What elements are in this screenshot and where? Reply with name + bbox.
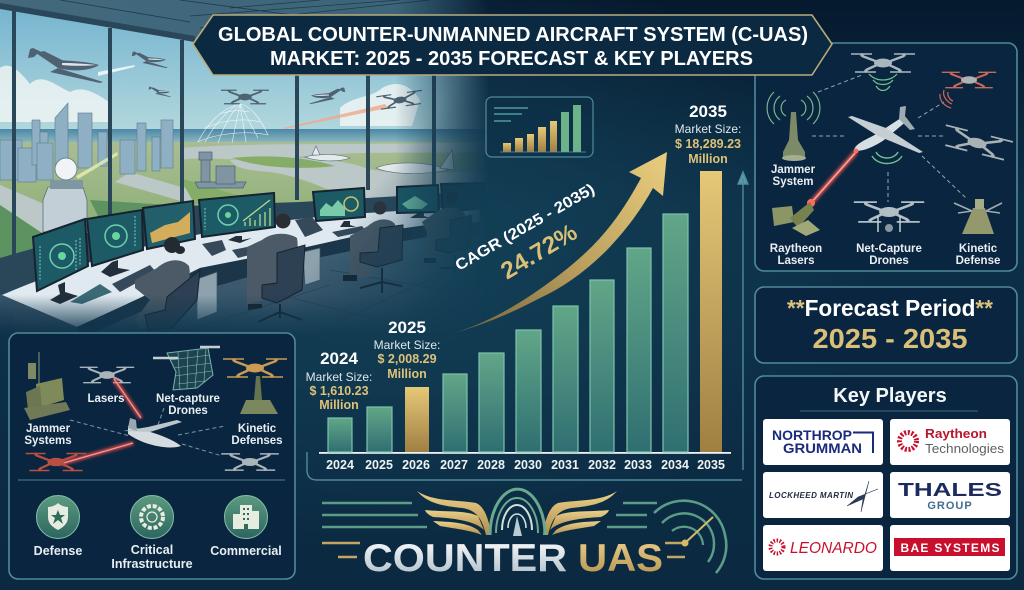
icon: central UAV — [848, 106, 923, 153]
wall below windows — [0, 194, 442, 295]
logo: northrop grumman — [763, 419, 883, 465]
logo: northrop grumman: GRUMMAN — [783, 440, 862, 456]
sky drones — [28, 48, 424, 110]
forecast heading: **Forecast Period** — [787, 295, 993, 321]
icon: net-capture drone — [854, 201, 924, 232]
ceiling — [0, 0, 500, 42]
bars — [328, 171, 722, 452]
year axis labels: 2027 — [440, 458, 468, 472]
sector: defense — [34, 496, 82, 558]
laser beams in the sky — [98, 65, 135, 76]
panel: left counter-drone and sectors — [9, 333, 295, 579]
callout: 2035 market size: Market Size: — [675, 122, 741, 136]
wordmark: COUNTER — [363, 537, 567, 580]
laser beam — [807, 148, 858, 207]
mini chart card — [486, 97, 593, 157]
runways — [0, 143, 470, 233]
parked airliners — [305, 146, 454, 174]
city skyline — [0, 103, 173, 182]
callout: 2035 market size: 2035 — [689, 102, 727, 121]
panel: top right counter-drone diagram — [755, 43, 1017, 271]
wings — [417, 491, 617, 535]
year axis labels: 2034 — [661, 458, 689, 472]
callout: 2025 market size: Market Size: — [374, 338, 440, 352]
label: raytheon lasers: Raytheon — [770, 243, 822, 255]
year axis labels: 2024 — [326, 458, 354, 472]
title line 2: MARKET: 2025 - 2035 FORECAST & KEY PLAYERS — [270, 48, 753, 70]
callout: CAGR: CAGR (2025 - 2035) — [452, 181, 598, 274]
icon: red drone — [26, 453, 86, 471]
year axis labels: 2026 — [402, 458, 430, 472]
label: critical infrastructure: Critical — [131, 543, 173, 557]
icon: net-capture drone — [153, 347, 220, 390]
logo: Counter UAS — [322, 489, 726, 580]
banner title — [193, 15, 832, 75]
callout: 2024 market size: Market Size: — [306, 370, 372, 384]
icon: white drone — [221, 453, 279, 471]
year axis labels: 2025 — [365, 458, 393, 472]
label: kinetic defenses: Kinetic — [238, 423, 277, 435]
label: net-capture drones: Net-capture — [156, 393, 220, 405]
callout: 2035 market size: $ 18,289.23 — [675, 137, 741, 151]
callout: 2024 market size: $ 1,610.23 — [309, 384, 369, 398]
connector lines — [812, 75, 966, 202]
arrow: CAGR growth — [450, 152, 667, 334]
label: commercial: Commercial — [210, 544, 282, 558]
window frames — [0, 3, 436, 258]
year axis labels: 2033 — [624, 458, 652, 472]
key players heading: Key Players — [833, 385, 947, 407]
desk — [2, 206, 480, 327]
logo: thales group: THALES — [898, 480, 1002, 500]
callout: 2035 market size — [675, 102, 741, 166]
icon: central UAV — [123, 418, 182, 448]
icon: signal arcs — [872, 152, 902, 164]
airport tower and hangar — [195, 152, 246, 188]
icon: jammer system tower — [767, 92, 820, 161]
callout: CAGR: 24.72% — [496, 219, 582, 285]
signal dish — [490, 489, 545, 535]
bar chart: market size — [307, 171, 742, 480]
chart frame and axis — [307, 452, 742, 480]
icon: kinetic defense turret — [954, 199, 1002, 234]
logo: northrop grumman: NORTHROP — [772, 427, 852, 443]
year axis labels: 2028 — [477, 458, 505, 472]
label: critical infrastructure: Infrastructure — [111, 557, 193, 571]
sky through windows — [0, 9, 484, 129]
label: raytheon lasers: Lasers — [777, 255, 815, 267]
label: jammer system: Jammer — [771, 164, 816, 176]
icon: red drone — [940, 72, 996, 108]
radar tower — [43, 158, 87, 232]
label: jammer systems: Jammer — [26, 423, 71, 435]
panel: key players — [755, 376, 1017, 579]
panel: forecast period — [755, 287, 1017, 363]
label: net-capture drones: Drones — [869, 255, 909, 267]
logo: lockheed martin: LOCKHEED MARTIN — [769, 491, 853, 500]
screen charts — [150, 212, 190, 243]
label: jammer system: System — [773, 176, 813, 188]
illustration: control room — [0, 0, 500, 340]
callout: 2024 market size: 2024 — [320, 349, 358, 368]
callout: 2025 market size: $ 2,008.29 — [377, 352, 437, 366]
callout: 2024 market size — [306, 349, 372, 412]
logo: thales group — [890, 472, 1010, 518]
label: kinetic defenses: Defenses — [231, 435, 283, 447]
icon: jammer systems — [24, 352, 70, 420]
label: jammer systems: Systems — [24, 435, 72, 447]
year axis labels: 2032 — [588, 458, 616, 472]
year axis labels: 2030 — [514, 458, 542, 472]
icon: top drone — [851, 53, 915, 90]
connector lines — [70, 405, 225, 456]
label: kinetic defense: Kinetic — [959, 243, 998, 255]
icon: right drone — [941, 124, 1013, 162]
year axis labels: 2031 — [551, 458, 579, 472]
logo: bae systems — [890, 525, 1010, 571]
desk front faces — [2, 295, 76, 326]
clouds — [0, 66, 420, 126]
operators — [135, 192, 465, 330]
floor — [0, 237, 457, 328]
callout: 2025 market size: 2025 — [388, 318, 426, 337]
sector: commercial — [210, 496, 282, 558]
office chairs — [145, 215, 472, 330]
year axis labels — [326, 458, 725, 472]
label: net-capture drones: Drones — [168, 405, 208, 417]
arrow: vertical value axis — [738, 172, 748, 470]
laser beams — [60, 379, 141, 464]
logo: raytheon technologies: Technologies — [925, 441, 1005, 456]
forecast years: 2025 - 2035 — [812, 323, 968, 354]
sea horizon — [0, 129, 500, 142]
logo: thales group: GROUP — [927, 500, 973, 512]
keyboards and phone — [70, 217, 366, 304]
desk drawers — [197, 248, 320, 320]
label: net-capture drones: Net-Capture — [856, 243, 922, 255]
title line 1: GLOBAL COUNTER-UNMANNED AIRCRAFT SYSTEM (C-UAS) — [218, 24, 808, 46]
icon: laser drone — [80, 367, 134, 383]
radar net dome — [198, 104, 268, 143]
year axis labels: 2035 — [697, 458, 725, 472]
logo: leonardo — [763, 525, 883, 571]
airport ground — [0, 142, 474, 233]
speed streaks — [322, 503, 657, 527]
logo: raytheon technologies — [890, 419, 1010, 465]
logo: bae systems: BAE SYSTEMS — [900, 541, 1000, 555]
logo: Counter UAS: UAS — [578, 537, 663, 580]
callout: 2025 market size: Million — [387, 367, 427, 381]
monitors — [33, 183, 485, 304]
gauge — [654, 501, 726, 573]
icon: kinetic defense — [223, 358, 287, 414]
callout: 2024 market size: Million — [319, 398, 359, 412]
label: defense: Defense — [34, 544, 82, 558]
logo: leonardo: LEONARDO — [790, 540, 877, 557]
logo: raytheon technologies: Raytheon — [925, 426, 987, 441]
label: kinetic defense: Defense — [956, 255, 1000, 267]
logo: lockheed martin — [763, 472, 883, 518]
sector: critical infrastructure — [111, 496, 193, 571]
callout: 2035 market size: Million — [688, 152, 728, 166]
monitor stands — [50, 213, 430, 304]
label: lasers: Lasers — [87, 393, 125, 405]
callout: 2025 market size — [374, 318, 440, 381]
icon: raytheon laser launcher — [772, 202, 820, 236]
